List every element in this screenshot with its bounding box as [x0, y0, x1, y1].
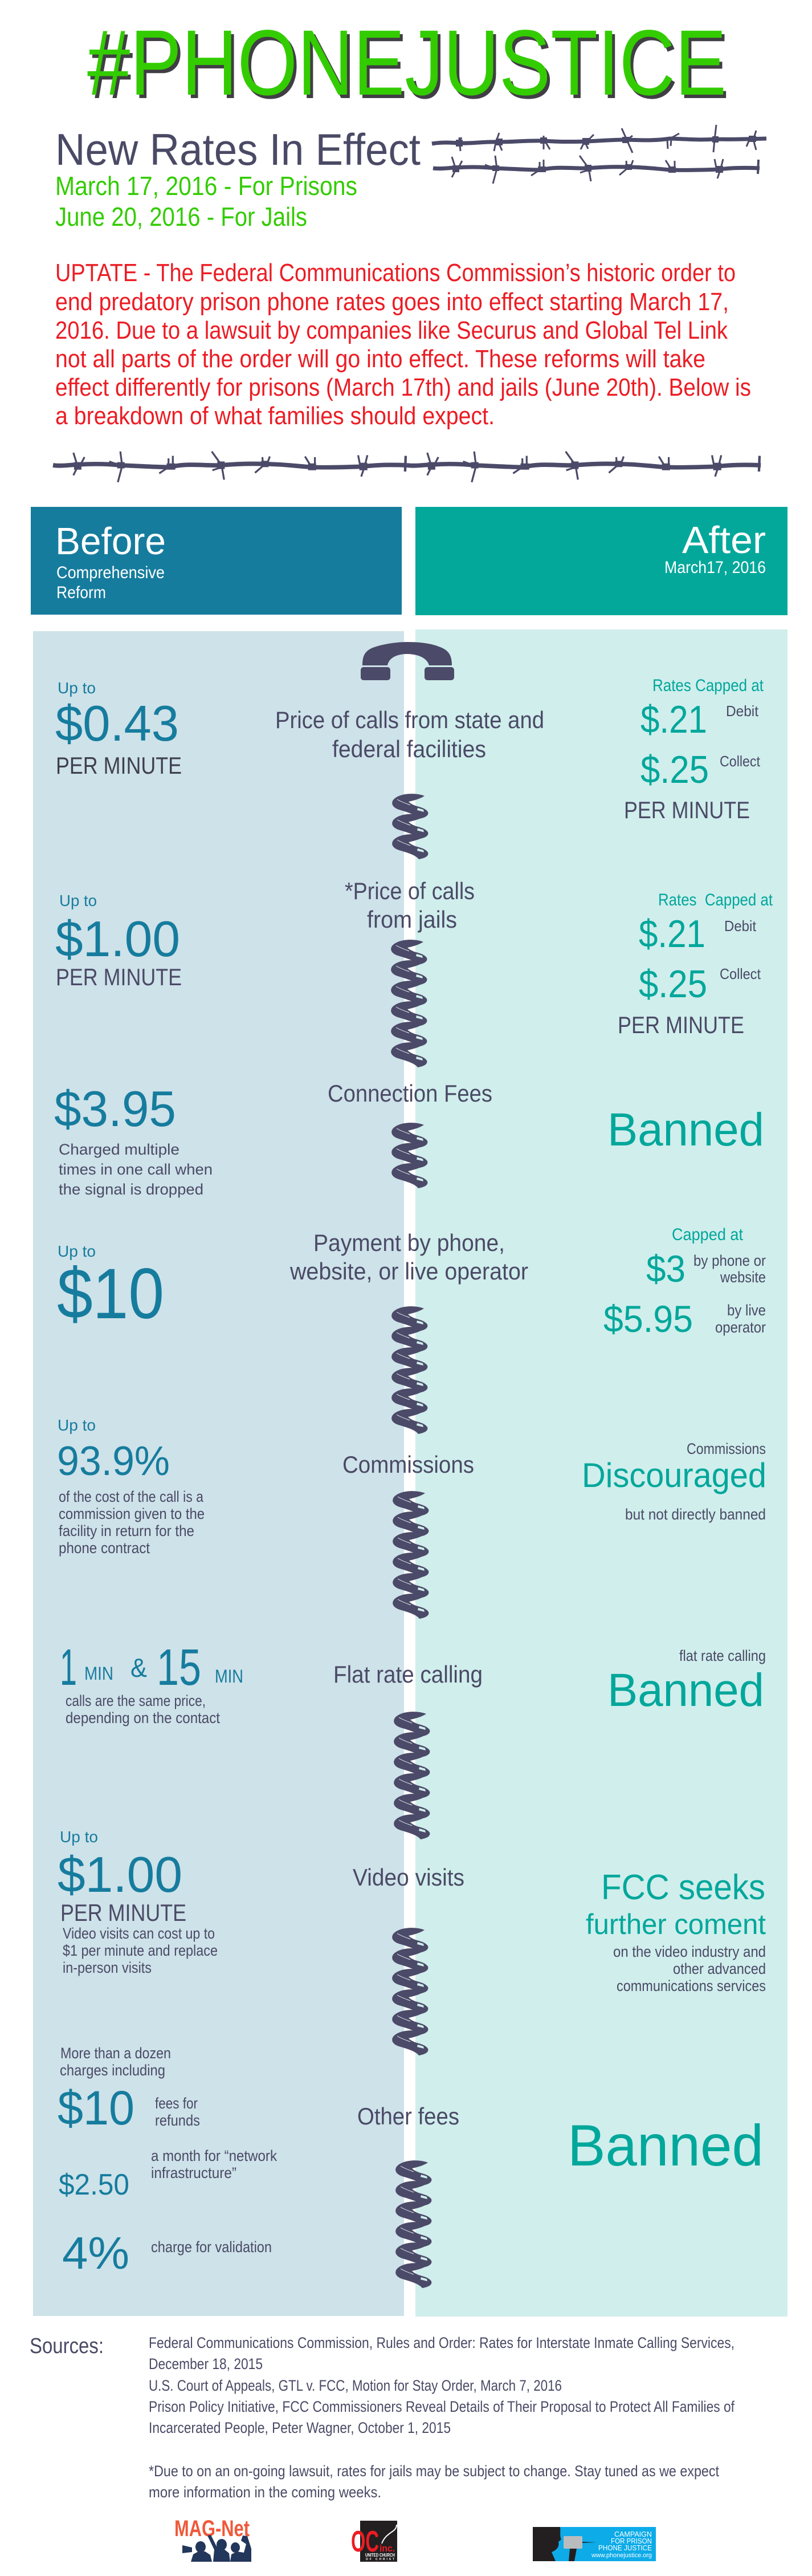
before value: infrastructure”	[151, 2164, 236, 2181]
before value: a month for “network	[151, 2147, 277, 2164]
panel: before column background	[33, 631, 404, 2316]
before value: Up to	[59, 892, 97, 909]
before value: 4%	[62, 2228, 129, 2278]
logo: OC Inc. United Church of Christ: UNITED CHURCH	[365, 2553, 395, 2558]
row label: Connection Fees	[328, 1080, 492, 1107]
after value	[618, 891, 773, 1038]
after value: FCC seeks	[601, 1868, 765, 1907]
sources heading: Sources:	[30, 2334, 104, 2358]
text block: sources list: Incarcerated People, Peter Wagner, October 1, 2015	[149, 2419, 451, 2436]
before value: times in one call when	[59, 1161, 213, 1178]
row label: website, or live operator	[289, 1258, 528, 1285]
after value: Rates Capped at	[652, 676, 764, 695]
text block: update paragraph	[55, 259, 751, 430]
row: jail calls	[55, 877, 773, 1038]
after value: $.21	[639, 912, 705, 956]
row: state and federal calls	[55, 676, 764, 823]
panel: after header: March17, 2016	[664, 558, 766, 577]
logo: Campaign for Prison Phone Justice: www.phonejustice.org	[591, 2552, 652, 2559]
row: commissions	[57, 1416, 766, 1557]
text block: sources list: U.S. Court of Appeals, GTL v. FCC, Motion for Stay Order, March 7, 2016	[149, 2377, 562, 2394]
after value: PER MINUTE	[618, 1011, 744, 1038]
before value: commission given to the	[59, 1505, 205, 1522]
after value: Banned	[607, 1104, 764, 1156]
logo: Campaign for Prison Phone Justice: PHONE JUSTICE	[598, 2544, 652, 2552]
text block: update paragraph: a breakdown of what families should expect.	[55, 402, 495, 430]
after value: $.21	[640, 698, 707, 741]
icon: telephone handset	[361, 642, 454, 680]
before value: Up to	[58, 1242, 96, 1260]
row label	[345, 877, 475, 933]
panel: before header: Comprehensive	[56, 563, 165, 582]
after value: $.25	[639, 962, 707, 1006]
after value: Banned	[568, 2113, 764, 2178]
panel: after column background	[415, 629, 787, 2317]
after value: PER MINUTE	[624, 797, 750, 823]
effective dates	[55, 171, 357, 231]
after value: further coment	[586, 1908, 766, 1940]
after value: Collect	[720, 753, 761, 770]
before value: MIN	[84, 1663, 113, 1684]
before value: $1.00	[55, 911, 180, 967]
icon: phone cord segment 7	[392, 1928, 428, 2055]
after value	[603, 1225, 766, 1340]
before value: facility in return for the	[59, 1522, 194, 1539]
text block: jail rates footnote: *Due to on an on-going lawsuit, rates for jails may be subject to change. Stay tuned as we expect	[149, 2463, 719, 2480]
effective dates: June 20, 2016 - For Jails	[55, 202, 307, 231]
before value: in-person visits	[63, 1959, 152, 1976]
before value: 1	[60, 1639, 77, 1696]
row: other fees	[58, 2045, 764, 2278]
effective dates: March 17, 2016 - For Prisons	[55, 171, 357, 201]
before value: of the cost of the call is a	[59, 1488, 204, 1505]
after value: Commissions	[687, 1440, 766, 1457]
row label: Payment by phone,	[313, 1229, 505, 1256]
before value: charges including	[60, 2062, 165, 2079]
panel: before header: Reform	[56, 583, 106, 602]
after value	[582, 1440, 766, 1523]
logo: OC Inc. United Church of Christ: OF CHRIST	[366, 2558, 394, 2561]
before value: $0.43	[55, 695, 179, 751]
icon: phone cord segment 2	[391, 940, 427, 1067]
before value: $1.00	[58, 1846, 182, 1903]
before value	[54, 1080, 213, 1198]
panel: after header	[415, 507, 787, 615]
after value: by phone or	[693, 1252, 766, 1269]
text block: update paragraph: end predatory prison phone rates goes into effect starting March 17,	[55, 288, 729, 316]
row label: federal facilities	[332, 736, 486, 762]
logo: Campaign for Prison Phone Justice	[533, 2527, 656, 2561]
after value	[624, 676, 764, 823]
before value: fees for	[155, 2095, 198, 2112]
row: video visits	[58, 1828, 766, 1994]
before value: depending on the contact	[66, 1709, 220, 1726]
row label: *Price of calls	[345, 877, 475, 904]
before value	[60, 1639, 243, 1726]
text block: jail rates footnote: more information in the coming weeks.	[149, 2484, 381, 2501]
before value: Up to	[60, 1828, 98, 1846]
before value: Up to	[58, 679, 96, 697]
logo: MAG-Net	[174, 2516, 251, 2562]
before value: PER MINUTE	[56, 964, 182, 990]
before value: charge for validation	[151, 2238, 272, 2256]
before value: 93.9%	[57, 1439, 170, 1484]
after value: Debit	[724, 917, 757, 934]
row label	[275, 706, 544, 762]
before value: &	[130, 1653, 147, 1683]
after value: $3	[646, 1248, 685, 1290]
text block: sources list	[149, 2334, 735, 2436]
logo: Campaign for Prison Phone Justice: CAMPAIGN	[614, 2530, 652, 2538]
panel: before header: Before	[55, 520, 166, 563]
row label: Video visits	[353, 1864, 464, 1891]
before value: $10	[58, 2081, 134, 2135]
text block: update paragraph: 2016. Due to a lawsuit by companies like Securus and Global Tel Link	[55, 316, 728, 344]
before value: $1 per minute and replace	[63, 1942, 218, 1959]
row label: Other fees	[357, 2103, 459, 2130]
before value: the signal is dropped	[59, 1181, 203, 1198]
icon: phone cord segment 3	[391, 1123, 427, 1188]
after value: Banned	[607, 1664, 764, 1716]
after value: operator	[715, 1319, 766, 1336]
heading: new rates in effect: New Rates In Effect	[55, 124, 421, 174]
row label: Commissions	[342, 1451, 474, 1478]
after value: Rates Capped at	[658, 891, 773, 909]
row label: Flat rate calling	[333, 1661, 483, 1688]
row: connection fees	[54, 1080, 764, 1198]
row label	[289, 1229, 528, 1285]
icon: phone cord segment 4	[391, 1306, 427, 1434]
before value: Up to	[58, 1416, 96, 1434]
after value: by live	[727, 1302, 766, 1319]
icon: phone cord segment 8	[395, 2160, 431, 2288]
after value: $.25	[640, 748, 709, 791]
before value	[58, 2045, 277, 2278]
before value: Charged multiple	[59, 1141, 179, 1158]
text block: update paragraph: not all parts of the order will go into effect. These reforms will take	[55, 345, 705, 373]
before value: 15	[157, 1639, 201, 1696]
logo: OC Inc. United Church of Christ: inc.	[380, 2543, 395, 2554]
before value: refunds	[155, 2112, 200, 2129]
text block: jail rates footnote	[149, 2463, 719, 2501]
after value: on the video industry and	[613, 1943, 766, 1960]
logo: OC Inc. United Church of Christ: OC	[351, 2525, 379, 2558]
panel: before header	[31, 507, 402, 615]
text block: sources list: December 18, 2015	[149, 2355, 263, 2372]
before value: PER MINUTE	[56, 752, 182, 779]
after value: Capped at	[672, 1225, 744, 1244]
before value: $2.50	[59, 2168, 129, 2201]
before value: PER MINUTE	[60, 1899, 186, 1926]
before value	[55, 679, 182, 779]
logo: Campaign for Prison Phone Justice: FOR PRISON	[611, 2537, 652, 2545]
icon: barbed wire divider	[53, 452, 761, 482]
after value: Collect	[720, 965, 761, 982]
before value: Video visits can cost up to	[63, 1925, 215, 1942]
row: payment fees	[57, 1225, 766, 1340]
icon: barbed wire top	[432, 125, 766, 184]
before value: MIN	[215, 1666, 243, 1687]
after value: $5.95	[603, 1298, 693, 1340]
icon: phone cord segment 5	[393, 1491, 429, 1619]
after value: Discouraged	[582, 1456, 766, 1494]
before value: $10	[57, 1254, 164, 1334]
icon: phone cord segment 6	[394, 1712, 430, 1839]
after value: website	[720, 1269, 766, 1286]
after value: flat rate calling	[679, 1647, 766, 1664]
after value: other advanced	[673, 1960, 766, 1977]
row: flat rate calling	[60, 1639, 766, 1726]
icon: phone cord segment 1	[392, 794, 428, 859]
after value: but not directly banned	[625, 1506, 766, 1523]
before value	[58, 1828, 218, 1976]
before value: More than a dozen	[60, 2045, 171, 2062]
before value	[55, 892, 182, 990]
before value	[57, 1416, 205, 1557]
before value: calls are the same price,	[66, 1692, 206, 1709]
panel: after header: After	[682, 519, 766, 562]
after value: communications services	[617, 1977, 766, 1994]
logo: MAG-Net: MAG-Net	[174, 2516, 250, 2541]
row label: Price of calls from state and	[275, 706, 544, 733]
before value: phone contract	[59, 1539, 150, 1557]
row label: from jails	[367, 906, 457, 933]
after value	[586, 1868, 766, 1994]
after value: Debit	[726, 702, 759, 720]
before value: $3.95	[54, 1080, 176, 1137]
